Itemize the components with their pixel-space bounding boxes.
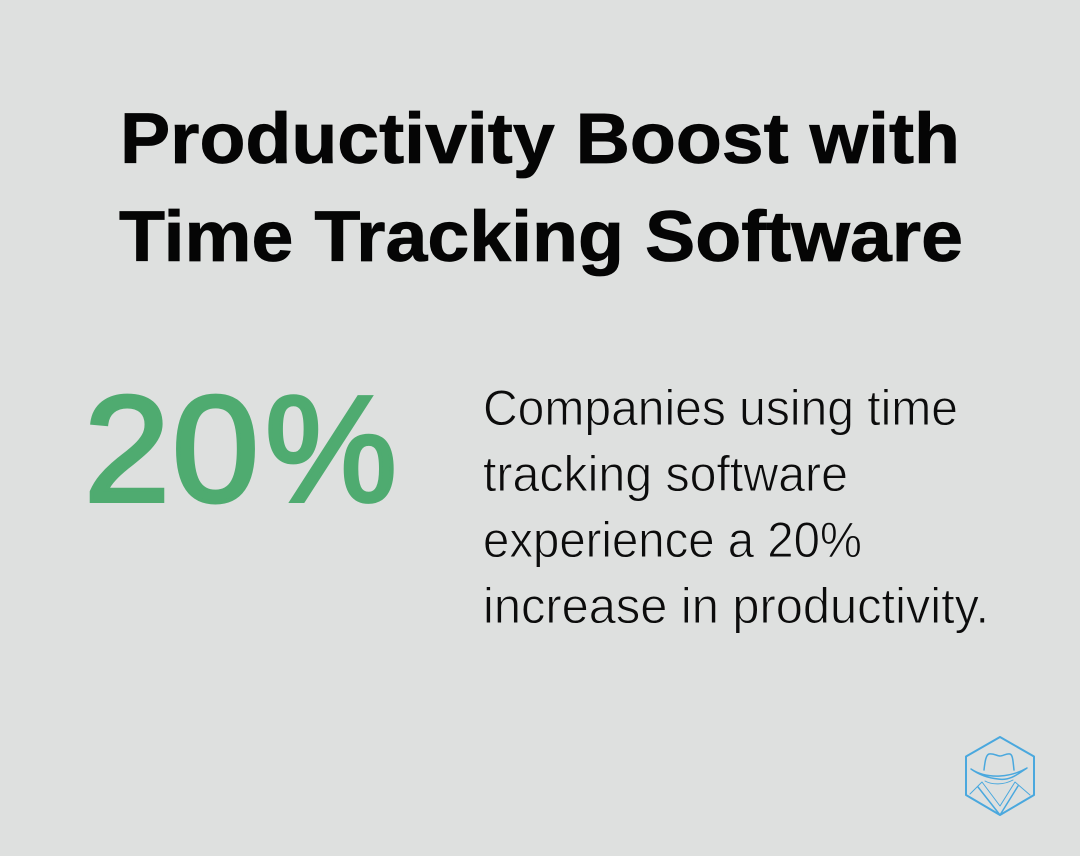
big statistic: 20% (84, 364, 397, 533)
description text: tracking software (483, 446, 848, 502)
title (119, 100, 963, 277)
description text: Companies using time (483, 380, 958, 436)
icon: hexagon logo with spy in hat (966, 737, 1034, 815)
description text: increase in productivity. (483, 578, 989, 634)
title: Productivity Boost with (120, 100, 960, 179)
big statistic: 20%: % (265, 364, 397, 533)
description text: experience a 20% (483, 512, 862, 568)
big statistic: 20%: 2 (84, 364, 170, 533)
description text (483, 380, 989, 634)
title: Time Tracking Software (119, 198, 963, 277)
big statistic: 20%: 0 (172, 364, 259, 533)
